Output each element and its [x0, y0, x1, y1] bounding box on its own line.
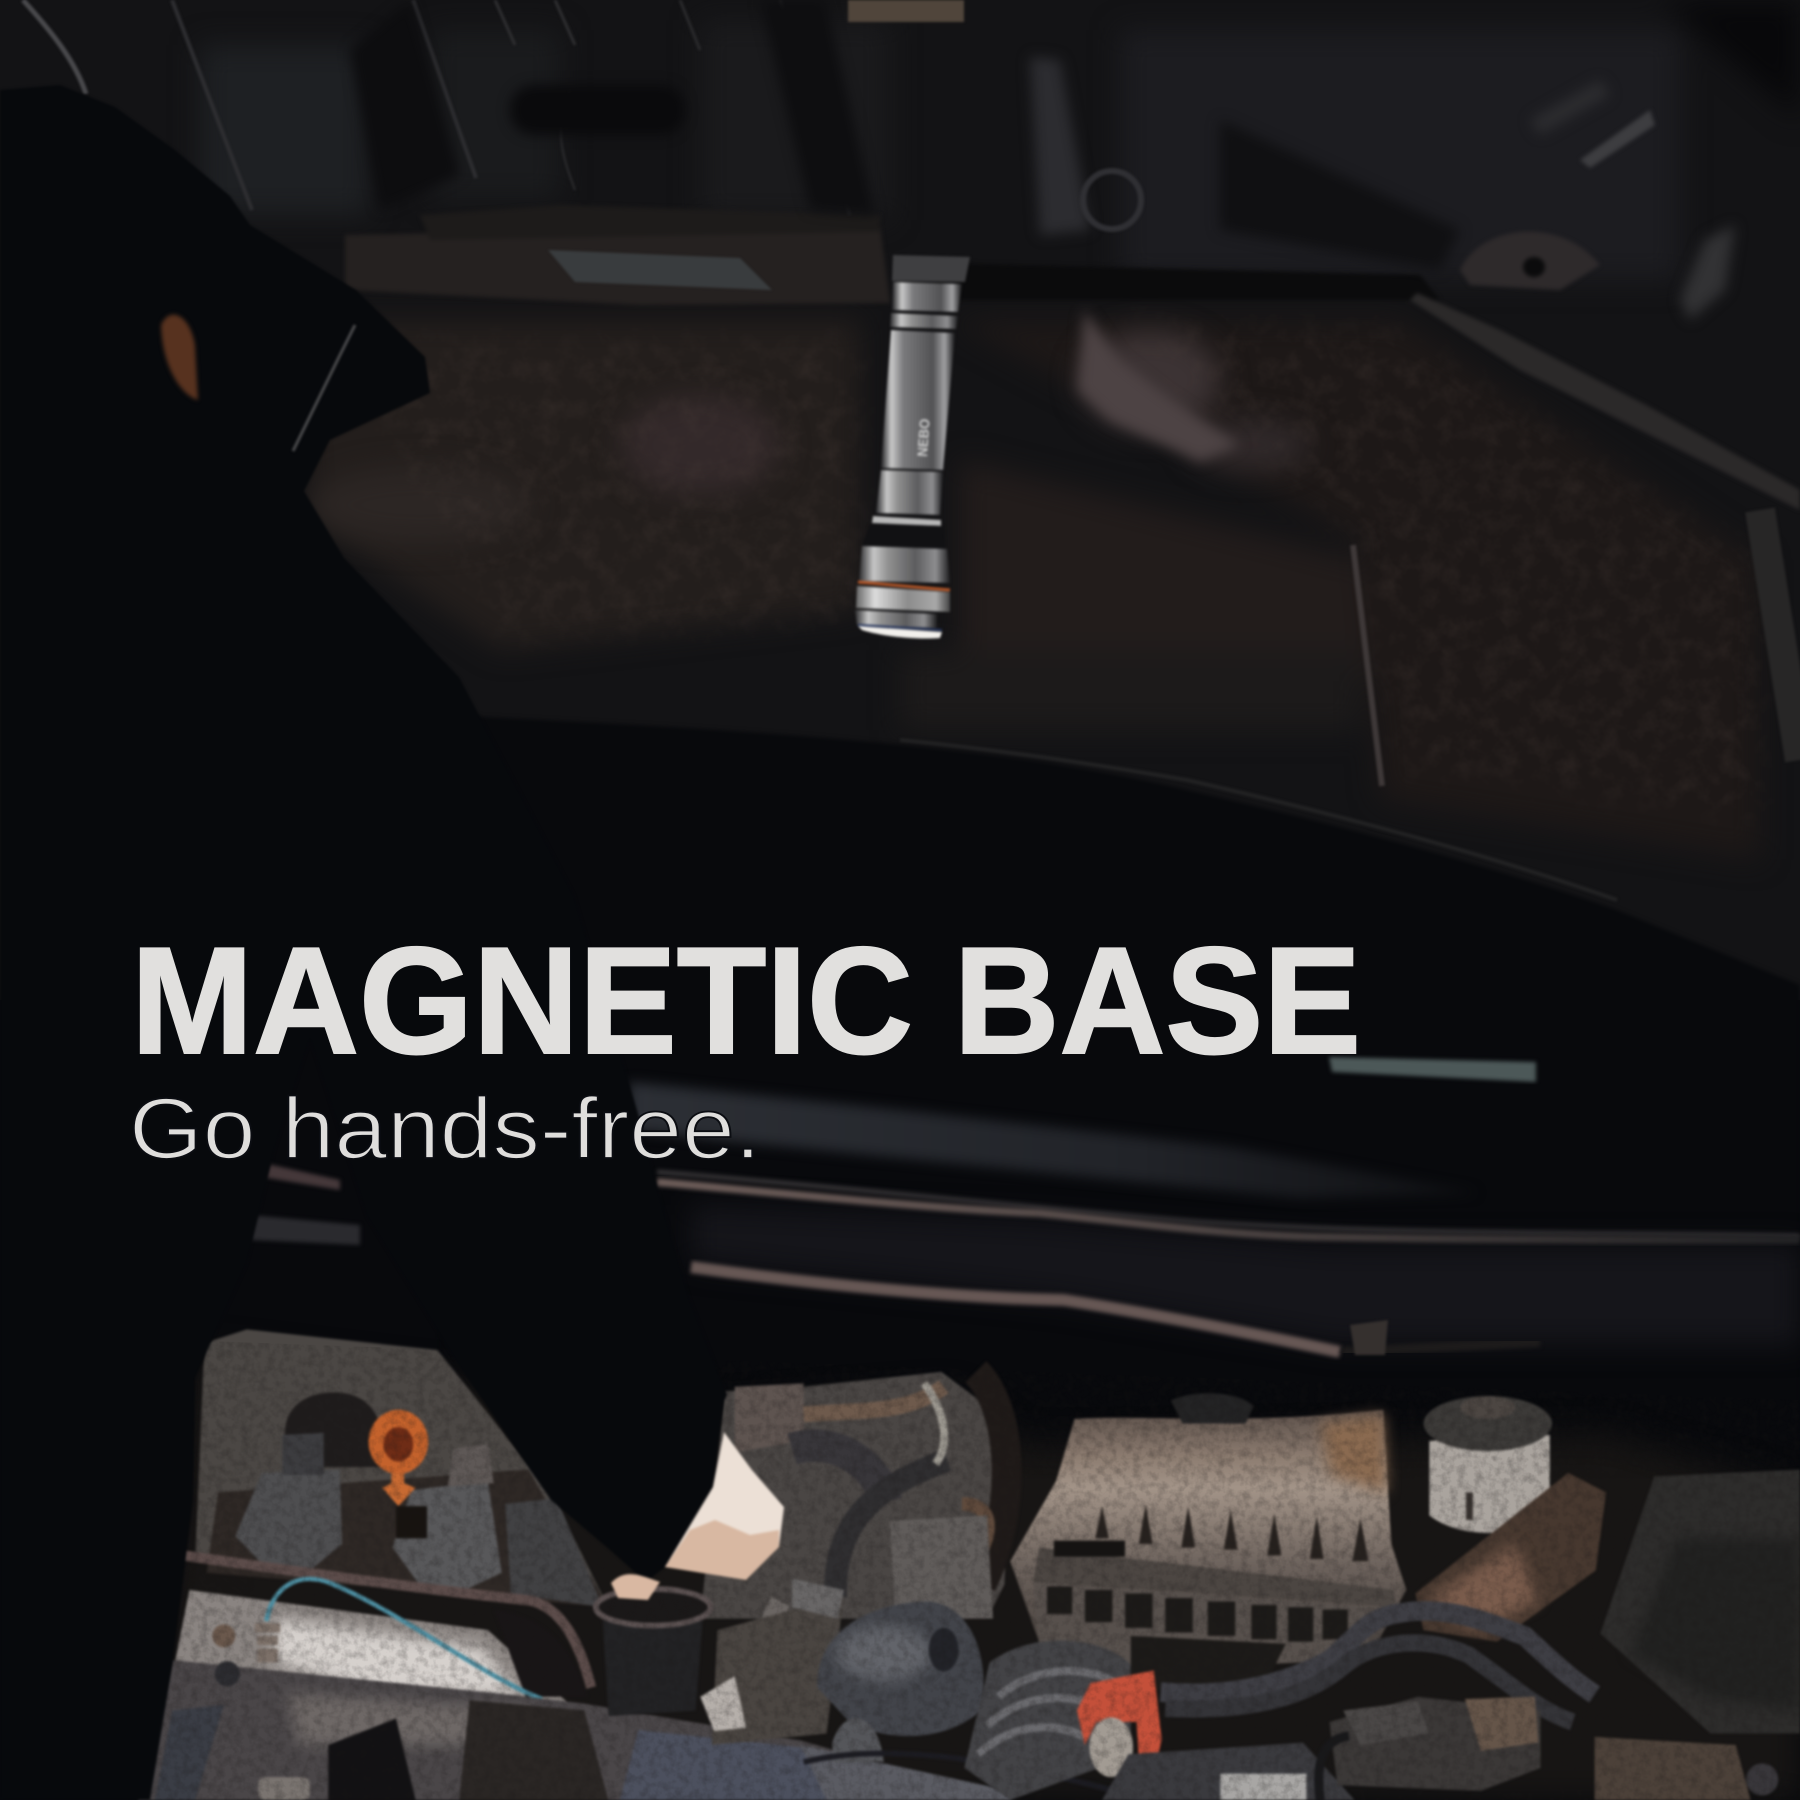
- fuse box: [1600, 1469, 1800, 1733]
- fluid reservoir: [1424, 1396, 1552, 1533]
- subtitle: Go hands-free.: [129, 1081, 761, 1177]
- bright reflection: [1329, 1057, 1536, 1082]
- ribbed intake: [964, 1641, 1131, 1800]
- car underbody: [0, 0, 1800, 1000]
- car sticker: [548, 250, 772, 290]
- engine bay left: valve cover and dipstick: [138, 1329, 1010, 1800]
- engine bay underlay: [138, 1349, 1800, 1800]
- rusty highlights: [310, 330, 1310, 543]
- flashlight: [855, 255, 970, 639]
- mechanic silhouette: [0, 85, 784, 1800]
- grey hood wedge: [629, 1082, 1478, 1198]
- wiring harness: [1161, 1611, 1595, 1722]
- title: MAGNETIC BASE: [131, 916, 1361, 1086]
- duct: [1415, 1473, 1606, 1642]
- cylinder under hand: [596, 1589, 711, 1716]
- ear: [161, 315, 198, 400]
- icon: orange dipstick cap: [369, 1410, 428, 1506]
- orange tag at top: [848, 0, 964, 22]
- red connector: [1077, 1670, 1162, 1777]
- shadow and hood underside: [250, 715, 1800, 1800]
- flashlight logo: NEBO: [914, 418, 933, 457]
- engine grime texture: [150, 1340, 1800, 1800]
- hand: [611, 1432, 784, 1600]
- glasses arm: [293, 325, 355, 451]
- engine bay right: air box: [964, 1393, 1800, 1800]
- engine bay: [138, 1329, 1800, 1800]
- under-car texture: [550, 364, 1731, 788]
- rubber boot: [817, 1601, 984, 1762]
- engine bay centre: hoses and cylinder: [596, 1372, 1148, 1800]
- battery and fittings: [1102, 1697, 1541, 1800]
